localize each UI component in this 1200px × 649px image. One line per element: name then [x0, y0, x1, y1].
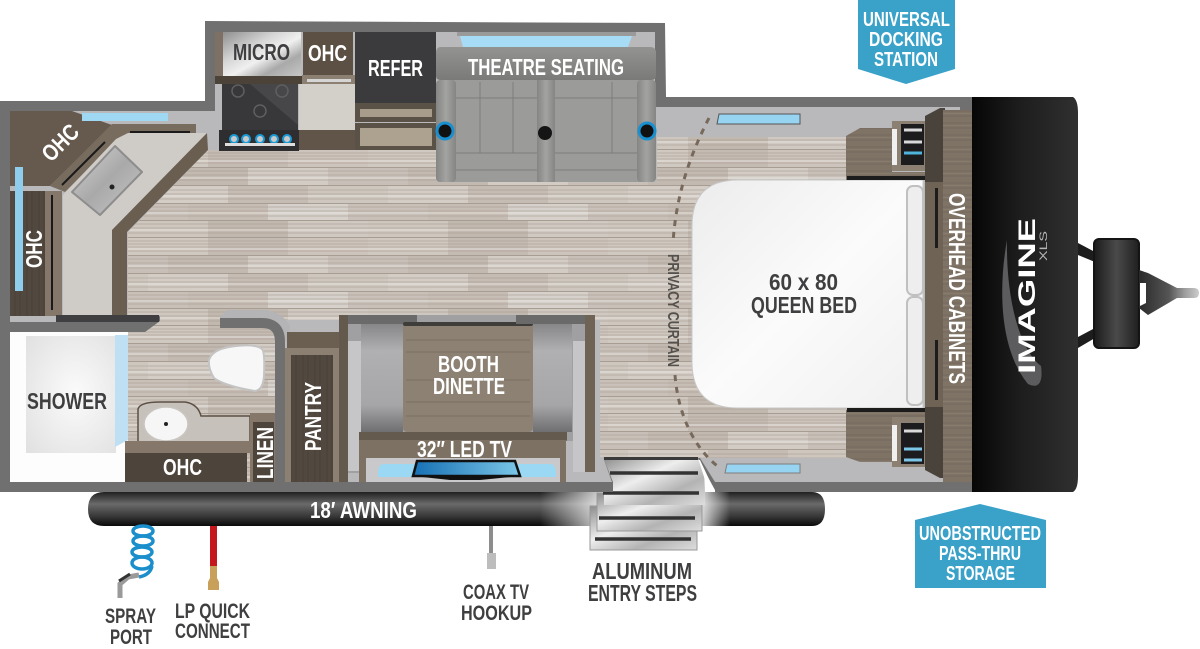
label: booth: BOOTH: [438, 351, 499, 377]
hose tail: [139, 566, 152, 577]
microwave base: [215, 76, 302, 84]
pillow lower: [907, 297, 923, 405]
shower door glass: [115, 335, 128, 474]
upper wardrobe contents: [901, 124, 924, 165]
stove knobs: [230, 135, 291, 143]
headboard dark column: [925, 108, 945, 478]
step door gap: [704, 470, 715, 492]
overhead cabinet wood: [943, 110, 973, 482]
awning: [88, 492, 825, 526]
bath wall end cap: [220, 310, 290, 343]
upper wardrobe mirror: [892, 129, 897, 165]
left top rail: [348, 315, 417, 324]
sink drain: [164, 422, 168, 426]
shower pan: [10, 332, 128, 482]
sign text: UNIVERSAL: [863, 9, 950, 31]
label: LP quick: LP QUICK: [175, 600, 250, 623]
panel: pantry: [285, 332, 340, 482]
brand logo: [1002, 218, 1050, 386]
upper cabinet rail: [50, 124, 196, 192]
label: connect: CONNECT: [175, 620, 250, 643]
sign text line 2: DOCKING: [869, 29, 943, 51]
headboard dark slot lower: [935, 340, 938, 400]
cabinet base: [302, 75, 355, 84]
rear window: [82, 113, 168, 121]
icon: coax TV hookup: [487, 526, 496, 569]
label: left overhead cabinet: OHC: [21, 230, 47, 268]
callout: unobstructed pass-thru storage: [915, 504, 1046, 588]
left bench light: [348, 341, 361, 471]
corner overhead cabinet: [10, 111, 112, 186]
wood plank floor: [128, 137, 850, 482]
sign shape: [858, 0, 955, 84]
label: queen bed: QUEEN BED: [751, 292, 857, 318]
label: theatre seating: THEATRE SEATING: [468, 54, 624, 80]
label: shower: SHOWER: [27, 388, 107, 414]
fade right of steps: [700, 492, 730, 526]
refrigerator drawer lower: [355, 123, 436, 150]
refrigerator: [355, 32, 436, 103]
panel: rear bathroom: [10, 310, 290, 482]
pantry door: [291, 355, 333, 482]
middle step: [597, 493, 702, 531]
aluminum entry steps: [590, 457, 715, 550]
TV window: [378, 464, 556, 477]
table top edge: [403, 322, 533, 326]
window bar: [457, 32, 636, 36]
slide window: [460, 36, 632, 47]
left wood panel: [215, 32, 223, 82]
spray nozzle: [120, 575, 139, 598]
vanity sink: [144, 407, 188, 441]
coax cable: [489, 526, 493, 558]
upper step: [604, 458, 705, 505]
frame arm upper: [1078, 243, 1095, 262]
stove trim: [225, 143, 295, 146]
left arm: [436, 80, 456, 182]
cup holder left: [437, 123, 453, 139]
headboard trim: [925, 182, 943, 407]
table grain: [406, 340, 530, 416]
microwave: [223, 32, 301, 76]
right top rail: [516, 315, 595, 324]
TV cabinet upper: [359, 432, 567, 440]
tread lines: [595, 473, 699, 539]
label: privacy curtain: PRIVACY CURTAIN: [664, 254, 681, 367]
panel: bedside wardrobes and headboard cabinets: [846, 108, 973, 482]
wall stub cap: [56, 315, 159, 322]
label: overhead cabinet: OHC: [308, 40, 347, 66]
side window: [15, 167, 23, 291]
vanity counter: [138, 402, 250, 442]
left overhead cabinet: [10, 191, 45, 316]
propane box: [1094, 239, 1139, 348]
hitch gap: [1140, 283, 1146, 306]
upper shadow: [847, 176, 925, 180]
countertop edge: [112, 133, 208, 316]
label: pantry: PANTRY: [300, 382, 326, 451]
callout: universal docking station: [858, 0, 955, 84]
sign text line 3: STORAGE: [946, 563, 1015, 585]
icon: spray port hose: [119, 526, 153, 598]
curtain upper track: [673, 118, 709, 243]
stove control panel: [219, 130, 299, 151]
lower nightstand: [846, 410, 925, 462]
lower wardrobe blue clothes: [904, 449, 922, 460]
hitch coupler: [1139, 270, 1199, 315]
marble counter: [299, 84, 355, 130]
awning roll right: [700, 492, 825, 526]
headboard dark slot: [935, 188, 938, 248]
stove highlight: [250, 84, 298, 125]
linen face: [253, 422, 274, 482]
awning roll left: [88, 492, 612, 526]
lower shadow: [847, 408, 925, 412]
sink drain: [110, 184, 114, 190]
label: corner overhead cabinet: OHC: [36, 118, 84, 167]
seat back: [436, 47, 656, 80]
sign text: UNOBSTRUCTED: [919, 523, 1041, 545]
trailer wall outline: [0, 21, 975, 492]
coax connector: [487, 553, 496, 569]
pillow upper: [907, 186, 923, 295]
lower cabinet: [299, 130, 355, 150]
cabinet handle: [307, 79, 351, 82]
lower wardrobe mirror: [892, 425, 897, 461]
lower wardrobe: [892, 417, 925, 467]
panel: galley kitchen: [215, 32, 436, 151]
sign shape: [915, 504, 1046, 588]
nozzle handle: [119, 574, 130, 581]
TV base: [413, 476, 520, 480]
upper overhead cabinet: [303, 32, 353, 76]
sign text line 3: STATION: [874, 49, 938, 71]
label: bath overhead cabinet: OHC: [163, 454, 202, 480]
label: entry steps: ENTRY STEPS: [588, 580, 697, 606]
logo suffix: XLS: [1038, 231, 1050, 261]
window: front road side: [717, 114, 800, 124]
sign text line 2: PASS-THRU: [939, 543, 1021, 565]
lower wardrobe contents: [901, 423, 924, 464]
left end post: [339, 315, 348, 482]
TV cabinet: [359, 432, 567, 482]
mattress: [692, 180, 923, 408]
label: aluminum: ALUMINUM: [592, 558, 692, 584]
icon: LP quick connect: [208, 526, 219, 590]
dinette base: [339, 315, 595, 473]
label: dinette: DINETTE: [433, 373, 505, 399]
panel: theatre seating: [436, 32, 656, 182]
pantry top: [287, 332, 340, 349]
vanity edge: [125, 441, 250, 453]
panel: booth dinette: [339, 315, 595, 482]
coiled hose: [132, 526, 153, 569]
cabinet door lines: [52, 132, 190, 310]
upper nightstand: [846, 128, 925, 180]
frame arm lower: [1078, 328, 1095, 348]
curtain lower track: [675, 375, 720, 468]
TV screen: [413, 461, 520, 476]
fade left of steps: [540, 492, 605, 526]
marble countertop: [63, 133, 207, 316]
tongue and hitch: [1078, 239, 1199, 348]
center arm: [537, 80, 555, 182]
right bench light: [573, 341, 585, 472]
window: front door side: [725, 464, 800, 473]
table: [403, 322, 533, 432]
front cap: [972, 97, 1078, 492]
label: bed size: 60 x 80: [769, 269, 838, 295]
seat body: [436, 80, 656, 182]
entry wall cap: [566, 441, 612, 482]
wall above shower: [0, 316, 160, 332]
curved bath wall: [220, 323, 280, 482]
right end post: [585, 315, 595, 473]
logo word: IMAGINE: [1014, 218, 1041, 374]
top edge: [604, 457, 698, 460]
lower wardrobe shirts: [904, 430, 922, 432]
refrigerator drawer upper: [355, 103, 436, 122]
linen cabinet: [250, 413, 275, 482]
label: port: PORT: [110, 626, 152, 649]
drawer face lower: [360, 128, 432, 146]
upper wardrobe shirts: [904, 130, 922, 142]
cup holder right: [639, 123, 655, 139]
label: linen: LINEN: [252, 427, 278, 479]
red LP hose: [210, 526, 217, 568]
right seat: [533, 324, 572, 432]
panel: rear corner kitchen: [0, 111, 208, 332]
left seat: [361, 324, 403, 432]
TV window frame: [366, 458, 560, 482]
upper wardrobe: [892, 121, 925, 171]
wall along door side: [0, 441, 613, 492]
toilet: [209, 345, 264, 391]
label: awning: 18′ AWNING: [310, 497, 417, 523]
rear kitchen and interior base: [10, 32, 960, 482]
kitchen sink: [72, 146, 142, 215]
label: hookup: HOOKUP: [461, 602, 532, 625]
lower step: [590, 506, 697, 550]
right arm: [637, 80, 656, 182]
shower basin: [26, 336, 116, 453]
queen bed: [692, 180, 923, 408]
label: refrigerator: REFER: [368, 55, 423, 81]
label: coax TV: COAX TV: [463, 581, 529, 604]
cabinet trim: [45, 191, 62, 316]
bath overhead cabinet: [125, 453, 247, 482]
label: spray: SPRAY: [105, 605, 156, 628]
label: overhead cabinets: OVERHEAD CABINETS: [944, 193, 970, 384]
label: LED TV: 32″ LED TV: [417, 436, 512, 462]
label: microwave: MICRO: [233, 39, 290, 65]
upper wardrobe blue clothes: [904, 152, 922, 154]
cup holder center: [538, 126, 552, 140]
drawer face upper: [360, 109, 432, 117]
stove burners: [232, 85, 288, 117]
brass fitting: [208, 566, 219, 590]
seat cushion divisions: [456, 82, 637, 170]
pantry frame: [285, 348, 340, 482]
gas stove: [222, 84, 298, 130]
privacy curtain: [673, 118, 720, 468]
logo swoosh: [1002, 240, 1042, 386]
